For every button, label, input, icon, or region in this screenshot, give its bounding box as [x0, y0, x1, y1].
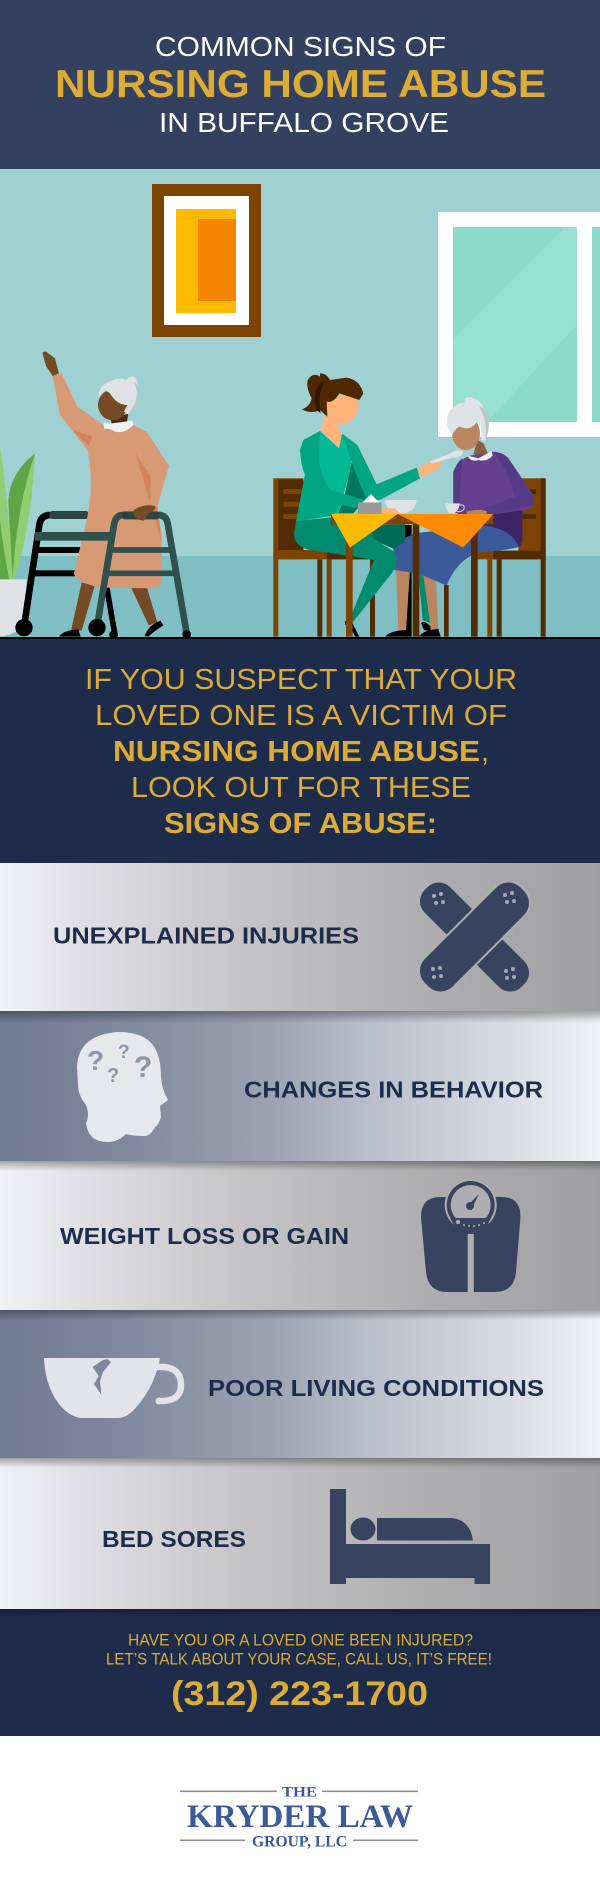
title line: common signs of: COMMON SIGNS OF: [155, 31, 446, 62]
intro text: NURSING HOME ABUSE: [113, 736, 480, 768]
right chair: [444, 478, 546, 637]
label: UNEXPLAINED INJURIES: [53, 922, 359, 948]
nurse neck and face: [302, 373, 363, 448]
title line: nursing home abuse: NURSING HOME ABUSE: [55, 63, 546, 106]
window: [438, 212, 600, 437]
pole and rear leg: [405, 525, 412, 637]
patient legs: [396, 569, 438, 632]
framed painting: [152, 184, 261, 337]
raised arm and dress: [53, 373, 169, 588]
intro text: ,: [481, 736, 489, 768]
walker front frame: [97, 511, 187, 633]
call to action text: HAVE YOU OR A LOVED ONE BEEN INJURED?: [128, 1630, 473, 1650]
raised hand: [42, 351, 59, 376]
icon: cracked cup: [44, 1358, 181, 1418]
patient skirt: [393, 526, 520, 586]
footer logo: KRYDER LAW: [187, 1799, 413, 1835]
icon: bathroom scale: [421, 1179, 520, 1293]
nurse torso: [296, 431, 353, 522]
legs: [71, 583, 95, 631]
plant: [0, 447, 35, 637]
footer logo: GROUP, LLC: [252, 1834, 347, 1850]
band: weight loss or gain: [0, 1161, 600, 1310]
icon: head with question marks: [77, 1032, 168, 1142]
footer logo: [180, 1784, 418, 1850]
title line: in buffalo grove: IN BUFFALO GROVE: [159, 107, 449, 138]
band: unexplained injuries: [0, 863, 600, 1011]
illustration: care home scene: [0, 169, 600, 640]
left chair: [273, 478, 375, 637]
call to action text: [106, 1630, 492, 1668]
intro text: [85, 664, 517, 840]
dining scene: [273, 373, 546, 637]
icon: head with question marks: ?: [87, 1045, 104, 1076]
icon: person in bed: [330, 1489, 490, 1584]
table items: [358, 494, 487, 514]
walker front bar: [35, 532, 110, 541]
call to action text: LET’S TALK ABOUT YOUR CASE, CALL US, IT’S FREE!: [106, 1650, 492, 1668]
band: changes in behavior: [0, 1011, 600, 1161]
head and hair: [98, 377, 138, 432]
icon: head with question marks: ?: [107, 1065, 119, 1087]
nurse legs: [370, 524, 405, 549]
call to action panel: [0, 1609, 600, 1736]
nurse raised arm and hand: [342, 434, 442, 500]
band: poor living conditions: [0, 1310, 600, 1458]
hand on walker: [133, 505, 155, 521]
nurse near sleeve: [296, 431, 365, 522]
icon: head with question marks: ?: [118, 1042, 130, 1063]
intro text: LOOK OUT FOR THESE: [131, 772, 471, 804]
intro panel: [0, 639, 600, 864]
icon: head with question marks: ?: [134, 1051, 152, 1084]
band: bed sores: [0, 1458, 600, 1609]
intro text: IF YOU SUSPECT THAT YOUR: [85, 664, 517, 696]
label: POOR LIVING CONDITIONS: [208, 1375, 544, 1401]
icon: crossed bandages: [412, 874, 537, 1000]
footer logo: THE: [282, 1784, 317, 1800]
intro text: SIGNS OF ABUSE:: [164, 808, 437, 840]
intro text: LOVED ONE IS A VICTIM OF: [95, 700, 507, 732]
woman with walker: [0, 351, 191, 639]
header banner: [0, 0, 600, 169]
table: [331, 514, 493, 637]
wheels: [15, 619, 191, 639]
patient top: [453, 452, 533, 548]
label: WEIGHT LOSS OR GAIN: [60, 1223, 349, 1249]
label: BED SORES: [102, 1526, 246, 1552]
patient head: [447, 397, 493, 461]
spoon: [429, 450, 463, 464]
walker back frame: [24, 511, 115, 635]
label: CHANGES IN BEHAVIOR: [244, 1076, 543, 1102]
phone number: (312) 223-1700: [171, 1675, 428, 1713]
nurse back arm shadow: [338, 462, 367, 513]
